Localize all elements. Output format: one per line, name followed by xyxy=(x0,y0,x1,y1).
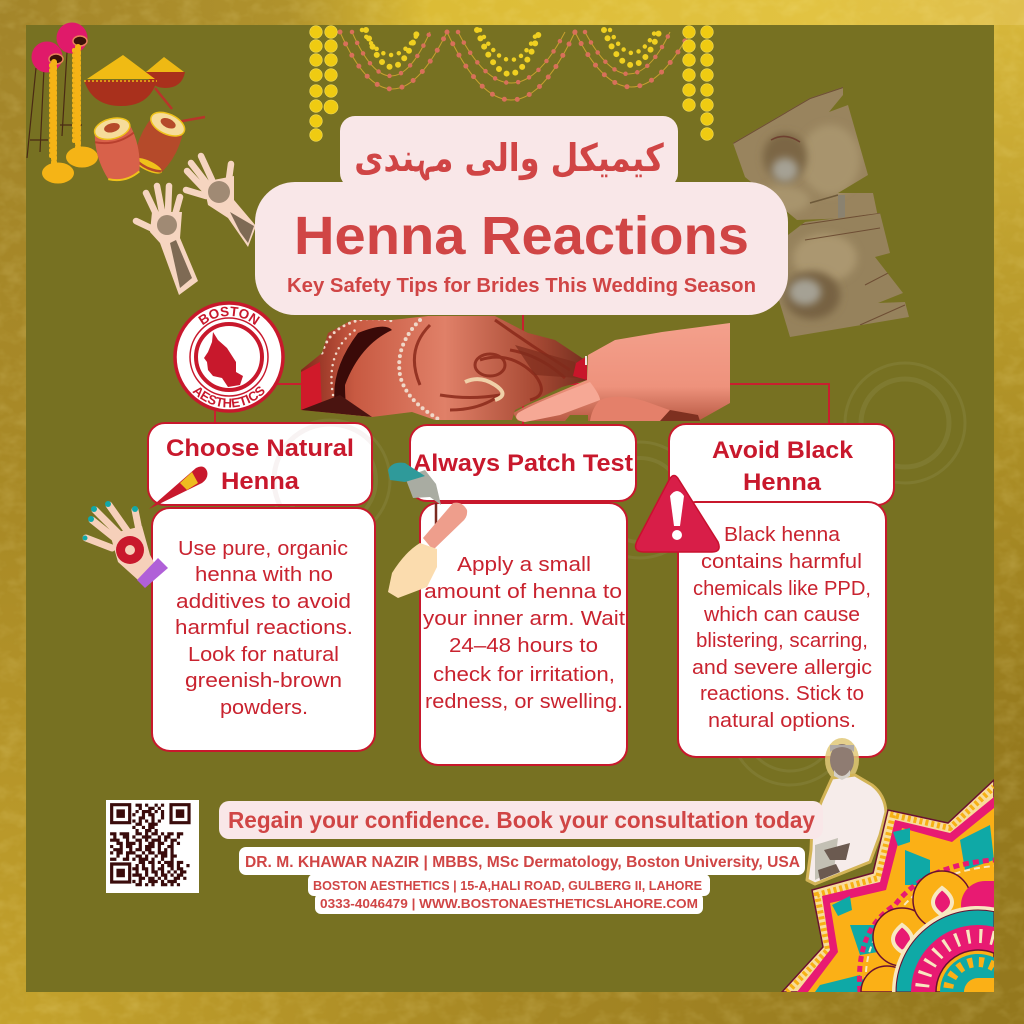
photo: burned allergic hands xyxy=(733,87,909,337)
card 2 body xyxy=(420,503,627,765)
card 3 body: chemicals like PPD, xyxy=(693,578,871,600)
garland: hanging bead strands and swags xyxy=(310,26,713,141)
logo face xyxy=(204,332,243,387)
brand logo xyxy=(173,301,285,413)
connector lines xyxy=(215,315,829,425)
card 1 body: Use pure, organic xyxy=(178,538,348,560)
clinic contact: 0333-4046479 | WWW.BOSTONAESTHETICSLAHORE.COM xyxy=(320,896,698,911)
card 2 body: 24–48 hours to xyxy=(449,635,598,657)
card 2 body: check for irritation, xyxy=(433,664,615,686)
card 2 body: amount of henna to xyxy=(424,581,622,603)
call to action pill xyxy=(219,801,823,839)
card 3: avoid black henna xyxy=(669,424,894,757)
illustration: powder bowls xyxy=(84,55,205,122)
title panel xyxy=(255,182,788,315)
groom thumb and fingers xyxy=(516,382,600,422)
icon: hand with henna and purple cuff xyxy=(82,501,168,588)
card 3 body: which can cause xyxy=(703,604,860,626)
mandala corner ornament xyxy=(782,780,994,992)
doctor credentials: DR. M. KHAWAR NAZIR | MBBS, MSc Dermatology, Boston University, USA xyxy=(245,854,800,871)
card 2 body: your inner arm. Wait xyxy=(423,608,625,630)
card 1 body: additives to avoid xyxy=(176,591,351,613)
card 2 body: Apply a small xyxy=(457,554,591,576)
QR code xyxy=(106,800,199,893)
card 3 body: contains harmful xyxy=(701,551,862,573)
card 3 body: and severe allergic xyxy=(692,657,872,679)
card 2 body: redness, or swelling. xyxy=(425,691,623,713)
card 1 body xyxy=(152,508,375,751)
clinic address: BOSTON AESTHETICS | 15-A,HALI ROAD, GULBERG II, LAHORE xyxy=(313,878,702,893)
card 1 body: harmful reactions. xyxy=(175,617,353,639)
card 2: always patch test xyxy=(410,425,636,765)
icon: warning triangle xyxy=(636,476,719,552)
photo: doctor portrait xyxy=(807,738,886,884)
clinic contact xyxy=(315,893,703,914)
groom hand xyxy=(513,323,730,421)
card 2 header xyxy=(410,425,636,501)
urdu title pill xyxy=(340,116,678,188)
card 3 body xyxy=(678,502,886,757)
card 2 header: Always Patch Test xyxy=(413,450,633,477)
card 1 header: Henna xyxy=(221,468,300,495)
salmon swags xyxy=(340,30,690,100)
card 1 header xyxy=(147,422,373,506)
card 3 header xyxy=(669,424,894,505)
urdu title pill: کیمیکل والی مہندی xyxy=(354,136,664,182)
card 3 header: Henna xyxy=(743,469,822,496)
bride hand xyxy=(301,316,587,420)
card 1 header: Choose Natural xyxy=(166,435,354,462)
subtitle: Key Safety Tips for Brides This Wedding Season xyxy=(287,275,756,297)
title: Henna Reactions xyxy=(294,206,749,266)
card 1 body: greenish-brown xyxy=(185,670,342,692)
card 1 body: powders. xyxy=(220,697,308,719)
photo: bride and groom hands xyxy=(295,312,730,424)
doctor credentials xyxy=(239,847,805,875)
illustration: pots with marigold strands xyxy=(27,22,98,184)
icon: henna cone xyxy=(149,467,207,509)
bead strands xyxy=(310,26,713,141)
icon: patch test hands xyxy=(388,463,467,598)
call to action pill: Regain your confidence. Book your consultation today xyxy=(228,807,815,833)
brand logo: AESTHETICS xyxy=(192,386,264,408)
watermark logos xyxy=(270,363,965,785)
card 1 body: Look for natural xyxy=(188,644,339,666)
card 3 body: Black henna xyxy=(724,524,841,546)
illustration: two hennaed hands xyxy=(136,156,256,295)
clinic address xyxy=(308,874,710,896)
card 3 header: Avoid Black xyxy=(712,437,854,464)
card 3 body: natural options. xyxy=(708,710,856,732)
card 1 body: henna with no xyxy=(195,564,333,586)
illustration: dhol drums xyxy=(90,107,190,184)
brand logo: BOSTON xyxy=(198,306,260,325)
card 3 body: blistering, scarring, xyxy=(696,630,868,652)
card 1: choose natural henna xyxy=(148,423,386,751)
card 3 body: reactions. Stick to xyxy=(700,683,864,705)
